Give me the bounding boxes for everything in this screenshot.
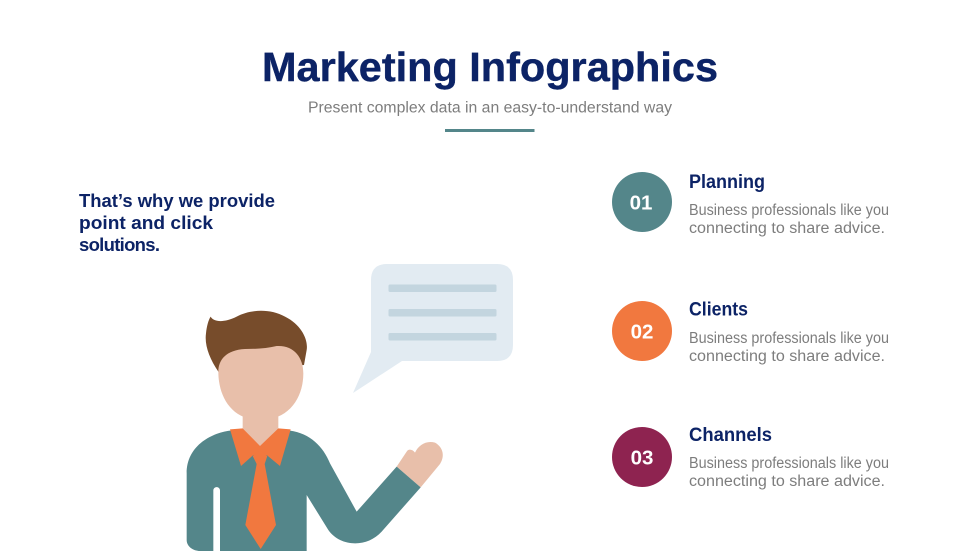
number badge 02: [612, 301, 672, 361]
face: [218, 346, 303, 420]
number badge 01: 01: [630, 192, 652, 214]
description 02: connecting to share advice.: [689, 348, 885, 365]
collar: [230, 428, 291, 466]
description 02: Business professionals like you: [689, 330, 889, 347]
title: Marketing Infographics: [262, 44, 718, 90]
number badge 02: 02: [631, 320, 653, 344]
description 02: [689, 330, 889, 365]
number badge 03: [612, 427, 672, 487]
tie: [245, 450, 276, 549]
item 03: channels: [612, 425, 889, 490]
illustration: businessman: [187, 311, 443, 551]
item 02: clients: [612, 300, 889, 365]
number badge 03: 03: [631, 446, 653, 470]
intro text: [79, 190, 275, 255]
description 01: [689, 202, 889, 237]
subtitle: Present complex data in an easy-to-understand way: [308, 100, 672, 116]
description 03: Business professionals like you: [689, 455, 889, 472]
title underline: [445, 129, 534, 132]
item 01: planning: [612, 172, 889, 237]
illustration: speech bubble: [353, 264, 513, 393]
heading: clients: Clients: [689, 300, 748, 320]
hand: [397, 442, 443, 487]
hair: [206, 311, 307, 372]
heading: planning: Planning: [689, 172, 765, 193]
description 01: Business professionals like you: [689, 202, 889, 219]
description 03: connecting to share advice.: [689, 473, 885, 490]
neck: [243, 410, 278, 447]
heading: channels: Channels: [689, 425, 772, 446]
number badge 01: [612, 172, 672, 232]
jacket: [187, 431, 421, 551]
intro text: point and click: [79, 212, 214, 233]
description 03: [689, 455, 889, 490]
intro text: That’s why we provide: [79, 190, 275, 211]
description 01: connecting to share advice.: [689, 220, 885, 237]
intro text: solutions.: [79, 234, 160, 255]
